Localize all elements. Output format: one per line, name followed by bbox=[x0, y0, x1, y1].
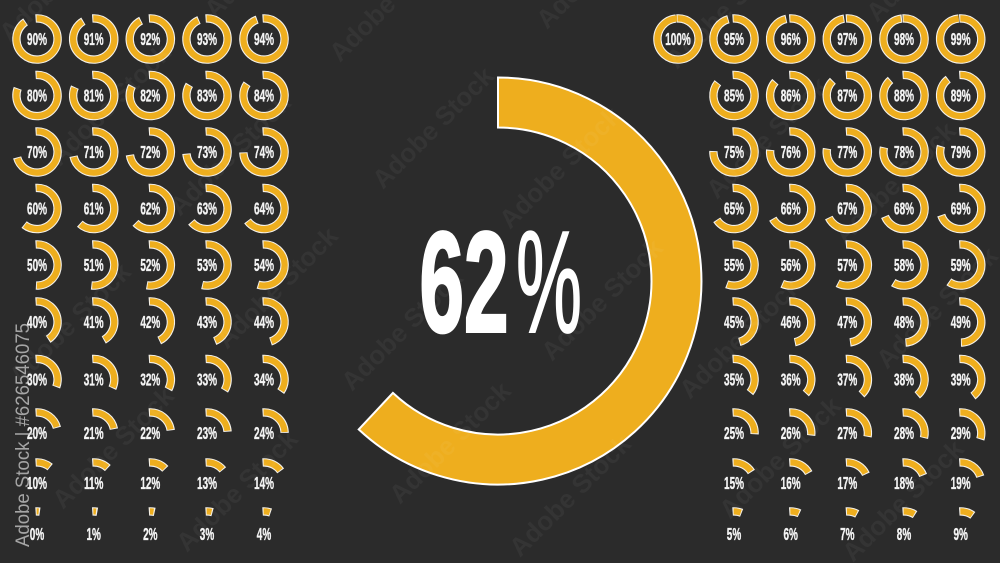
ring: 44%: 44% bbox=[254, 312, 274, 332]
ring: 92% bbox=[128, 17, 172, 61]
ring: 97%: 97% bbox=[837, 29, 858, 49]
ring: 3%: 3% bbox=[200, 524, 215, 544]
ring: 50%: 50% bbox=[27, 255, 47, 275]
ring: 15%: 15% bbox=[724, 473, 744, 493]
ring: 38% bbox=[882, 358, 926, 401]
ring: 79%: 79% bbox=[951, 142, 971, 162]
ring: 99% bbox=[939, 17, 983, 61]
ring: 85%: 85% bbox=[724, 86, 744, 105]
ring: 4%: 4% bbox=[257, 524, 272, 544]
ring: 28% bbox=[882, 411, 926, 455]
ring: 5% bbox=[712, 510, 756, 554]
ring: 33% bbox=[185, 358, 229, 401]
ring: 19%: 19% bbox=[951, 473, 971, 493]
ring: 79% bbox=[939, 130, 983, 174]
ring: 82%: 82% bbox=[140, 86, 161, 105]
ring: 47%: 47% bbox=[837, 312, 858, 332]
ring: 1% bbox=[72, 510, 116, 554]
ring: 54% bbox=[242, 243, 286, 287]
ring: 52%: 52% bbox=[140, 255, 161, 275]
ring: 14% bbox=[242, 461, 286, 505]
ring: 86% bbox=[769, 74, 813, 117]
ring: 92%: 92% bbox=[140, 29, 161, 49]
ring: 69%: 69% bbox=[951, 199, 971, 218]
ring: 77%: 77% bbox=[837, 142, 858, 162]
main value: 62%: % bbox=[516, 202, 582, 363]
ring: 85% bbox=[712, 74, 756, 117]
stock watermarks: Adobe Stock bbox=[493, 100, 627, 234]
ring: 64% bbox=[242, 187, 286, 230]
ring: 18%: 18% bbox=[894, 473, 914, 493]
ring: 15% bbox=[712, 461, 756, 505]
stock watermarks: Adobe Stock bbox=[383, 375, 517, 509]
ring: 66% bbox=[769, 187, 813, 230]
stock watermarks: Adobe Stock bbox=[163, 87, 297, 221]
ring: 6% bbox=[769, 510, 813, 554]
ring: 41%: 41% bbox=[84, 312, 104, 332]
ring: 14%: 14% bbox=[254, 473, 274, 493]
ring: 60% bbox=[15, 187, 59, 230]
ring: 42% bbox=[128, 300, 172, 344]
ring: 40% bbox=[15, 300, 59, 344]
ring: 69% bbox=[939, 187, 983, 230]
ring: 62% bbox=[128, 187, 172, 230]
ring: 21%: 21% bbox=[84, 423, 104, 443]
ring: 81% bbox=[72, 74, 116, 117]
ring: 20% bbox=[15, 411, 59, 455]
ring: 41% bbox=[72, 300, 116, 344]
ring: 32% bbox=[128, 358, 172, 401]
stock watermarks: Adobe Stock bbox=[503, 428, 637, 562]
ring: 57%: 57% bbox=[837, 255, 858, 275]
ring: 13% bbox=[185, 461, 229, 505]
ring: 8% bbox=[882, 510, 926, 554]
ring: 71%: 71% bbox=[84, 142, 104, 162]
ring: 25% bbox=[712, 411, 756, 455]
ring: 91%: 91% bbox=[84, 29, 104, 49]
ring: 70% bbox=[15, 130, 59, 174]
ring: 98%: 98% bbox=[894, 29, 914, 49]
ring: 5%: 5% bbox=[727, 524, 742, 544]
ring: 44% bbox=[242, 300, 286, 344]
ring: 51%: 51% bbox=[84, 255, 104, 275]
ring: 56%: 56% bbox=[781, 255, 801, 275]
ring: 83% bbox=[185, 74, 229, 117]
ring: 90%: 90% bbox=[27, 29, 47, 49]
ring: 16%: 16% bbox=[781, 473, 801, 493]
stock watermarks: Adobe Stock bbox=[713, 390, 847, 524]
ring: 67%: 67% bbox=[837, 199, 858, 218]
ring: 55%: 55% bbox=[724, 255, 744, 275]
ring: 23% bbox=[185, 411, 229, 455]
ring: 93%: 93% bbox=[197, 29, 217, 49]
ring: 43% bbox=[185, 300, 229, 344]
stock watermarks: Adobe Stock bbox=[700, 70, 834, 204]
ring: 53%: 53% bbox=[197, 255, 217, 275]
ring: 45%: 45% bbox=[724, 312, 744, 332]
ring: 0% bbox=[15, 510, 59, 554]
ring: 9% bbox=[939, 510, 983, 554]
ring: 66%: 66% bbox=[781, 199, 801, 218]
ring: 30% bbox=[15, 358, 59, 401]
ring: 17% bbox=[825, 461, 869, 505]
stock watermarks: Adobe Stock bbox=[210, 220, 344, 354]
ring: 59%: 59% bbox=[951, 255, 971, 275]
left ring grid: 0 to 94 percent bbox=[15, 17, 286, 554]
main value: 62%: 62 bbox=[419, 202, 509, 362]
ring: 83%: 83% bbox=[197, 86, 217, 105]
ring: 89% bbox=[939, 74, 983, 117]
ring: 88%: 88% bbox=[894, 86, 914, 105]
ring: 55% bbox=[712, 243, 756, 287]
ring: 19% bbox=[939, 461, 983, 505]
ring: 68% bbox=[882, 187, 926, 230]
stock watermarks: Adobe Stock bbox=[828, 115, 962, 249]
ring: 76% bbox=[769, 130, 813, 174]
ring: 72% bbox=[128, 130, 172, 174]
ring: 68%: 68% bbox=[894, 199, 914, 218]
ring: 9%: 9% bbox=[953, 524, 968, 544]
stock watermarks: Adobe Stock bbox=[170, 423, 304, 557]
ring: 31%: 31% bbox=[84, 370, 104, 389]
ring: 48% bbox=[882, 300, 926, 344]
ring: 84% bbox=[242, 74, 286, 117]
ring: 37%: 37% bbox=[837, 370, 858, 389]
ring: 47% bbox=[825, 300, 869, 344]
ring: 95% bbox=[712, 17, 756, 61]
ring: 60%: 60% bbox=[27, 199, 47, 218]
main ring: 62% bbox=[359, 78, 701, 485]
ring: 76%: 76% bbox=[781, 142, 801, 162]
ring: 87% bbox=[825, 74, 869, 117]
ring: 94%: 94% bbox=[254, 29, 274, 49]
stock watermarks: Adobe Stock bbox=[535, 232, 669, 366]
ring: 59% bbox=[939, 243, 983, 287]
ring: 20%: 20% bbox=[27, 423, 47, 443]
ring: 34%: 34% bbox=[254, 370, 274, 389]
stock watermarks: Adobe Stock bbox=[335, 262, 469, 396]
ring: 21% bbox=[72, 411, 116, 455]
ring: 89%: 89% bbox=[951, 86, 971, 105]
ring: 29% bbox=[939, 411, 983, 455]
ring: 31% bbox=[72, 358, 116, 401]
ring: 0%: 0% bbox=[30, 524, 45, 544]
ring: 23%: 23% bbox=[197, 423, 217, 443]
ring: 80% bbox=[15, 74, 59, 117]
ring: 94% bbox=[242, 17, 286, 61]
stock watermarks: Adobe Stock bbox=[366, 60, 500, 194]
ring: 98% bbox=[882, 17, 926, 61]
ring: 80%: 80% bbox=[27, 86, 47, 105]
ring: 39%: 39% bbox=[951, 370, 971, 389]
ring: 86%: 86% bbox=[781, 86, 801, 105]
ring: 84%: 84% bbox=[254, 86, 274, 105]
ring: 34% bbox=[242, 358, 286, 401]
ring: 88% bbox=[882, 74, 926, 117]
ring: 100% bbox=[656, 17, 700, 61]
ring: 30%: 30% bbox=[27, 370, 47, 389]
ring: 3% bbox=[185, 510, 229, 554]
ring: 7% bbox=[825, 510, 869, 554]
ring: 62%: 62% bbox=[140, 199, 161, 218]
ring: 51% bbox=[72, 243, 116, 287]
ring: 46%: 46% bbox=[781, 312, 801, 332]
ring: 37% bbox=[825, 358, 869, 401]
ring: 95%: 95% bbox=[724, 29, 744, 49]
ring: 65%: 65% bbox=[724, 199, 744, 218]
ring: 61%: 61% bbox=[84, 199, 104, 218]
ring: 12%: 12% bbox=[140, 473, 161, 493]
ring: 33%: 33% bbox=[197, 370, 217, 389]
stock watermarks: Adobe Stock bbox=[43, 37, 177, 171]
ring: 10% bbox=[15, 461, 59, 505]
ring: 96%: 96% bbox=[781, 29, 801, 49]
stock watermarks: Adobe Stock bbox=[3, 256, 137, 390]
ring: 4% bbox=[242, 510, 286, 554]
ring: 63% bbox=[185, 187, 229, 230]
ring: 50% bbox=[15, 243, 59, 287]
ring: 90% bbox=[15, 17, 59, 61]
ring: 17%: 17% bbox=[837, 473, 858, 493]
ring: 67% bbox=[825, 187, 869, 230]
ring: 22%: 22% bbox=[140, 423, 161, 443]
ring: 87%: 87% bbox=[837, 86, 858, 105]
ring: 2%: 2% bbox=[143, 524, 158, 544]
ring: 78% bbox=[882, 130, 926, 174]
ring: 40%: 40% bbox=[27, 312, 47, 332]
ring: 11% bbox=[72, 461, 116, 505]
right ring grid: 5 to 100 percent bbox=[656, 17, 983, 554]
ring: 29%: 29% bbox=[951, 423, 971, 443]
ring: 11%: 11% bbox=[84, 473, 104, 493]
vertical stock id caption: Adobe Stock | #626546075 bbox=[13, 323, 34, 547]
ring: 26%: 26% bbox=[781, 423, 801, 443]
ring: 35%: 35% bbox=[724, 370, 744, 389]
ring: 96% bbox=[769, 17, 813, 61]
ring: 58%: 58% bbox=[894, 255, 914, 275]
ring: 91% bbox=[72, 17, 116, 61]
ring: 64%: 64% bbox=[254, 199, 274, 218]
main value: 62% bbox=[419, 202, 582, 363]
ring: 49% bbox=[939, 300, 983, 344]
ring: 36% bbox=[769, 358, 813, 401]
ring: 72%: 72% bbox=[140, 142, 161, 162]
ring: 36%: 36% bbox=[781, 370, 801, 389]
ring: 8%: 8% bbox=[897, 524, 912, 544]
ring: 16% bbox=[769, 461, 813, 505]
ring: 26% bbox=[769, 411, 813, 455]
ring: 63%: 63% bbox=[197, 199, 217, 218]
ring: 82% bbox=[128, 74, 172, 117]
ring: 27%: 27% bbox=[837, 423, 858, 443]
ring: 45% bbox=[712, 300, 756, 344]
ring: 77% bbox=[825, 130, 869, 174]
ring: 75%: 75% bbox=[724, 142, 744, 162]
ring: 61% bbox=[72, 187, 116, 230]
ring: 99%: 99% bbox=[951, 29, 971, 49]
ring: 75% bbox=[712, 130, 756, 174]
ring: 48%: 48% bbox=[894, 312, 914, 332]
ring: 52% bbox=[128, 243, 172, 287]
ring: 58% bbox=[882, 243, 926, 287]
ring: 53% bbox=[185, 243, 229, 287]
ring: 74% bbox=[242, 130, 286, 174]
ring: 28%: 28% bbox=[894, 423, 914, 443]
stock watermarks: Adobe Stock bbox=[870, 240, 1000, 374]
ring: 70%: 70% bbox=[27, 142, 47, 162]
ring: 54%: 54% bbox=[254, 255, 274, 275]
ring: 65% bbox=[712, 187, 756, 230]
ring: 10%: 10% bbox=[27, 473, 47, 493]
ring: 12% bbox=[128, 461, 172, 505]
ring: 93% bbox=[185, 17, 229, 61]
ring: 32%: 32% bbox=[140, 370, 161, 389]
ring: 13%: 13% bbox=[197, 473, 217, 493]
ring: 46% bbox=[769, 300, 813, 344]
ring: 7%: 7% bbox=[840, 524, 855, 544]
stock watermarks: Adobe Stock bbox=[673, 270, 807, 404]
ring: 81%: 81% bbox=[84, 86, 104, 105]
stock watermarks: Adobe Stock bbox=[46, 380, 180, 514]
ring: 100%: 100% bbox=[665, 29, 691, 49]
ring: 97% bbox=[825, 17, 869, 61]
ring: 24%: 24% bbox=[254, 423, 274, 443]
ring: 27% bbox=[825, 411, 869, 455]
ring: 49%: 49% bbox=[951, 312, 971, 332]
ring: 25%: 25% bbox=[724, 423, 744, 443]
ring: 73% bbox=[185, 130, 229, 174]
ring: 1%: 1% bbox=[86, 524, 101, 544]
ring: 24% bbox=[242, 411, 286, 455]
ring: 56% bbox=[769, 243, 813, 287]
ring: 22% bbox=[128, 411, 172, 455]
ring: 57% bbox=[825, 243, 869, 287]
ring: 35% bbox=[712, 358, 756, 401]
ring: 74%: 74% bbox=[254, 142, 274, 162]
ring: 42%: 42% bbox=[140, 312, 161, 332]
ring: 78%: 78% bbox=[894, 142, 914, 162]
ring: 71% bbox=[72, 130, 116, 174]
ring: 18% bbox=[882, 461, 926, 505]
ring: 2% bbox=[128, 510, 172, 554]
ring: 38%: 38% bbox=[894, 370, 914, 389]
ring: 6%: 6% bbox=[783, 524, 798, 544]
ring: 43%: 43% bbox=[197, 312, 217, 332]
ring: 73%: 73% bbox=[197, 142, 217, 162]
ring: 39% bbox=[939, 358, 983, 401]
